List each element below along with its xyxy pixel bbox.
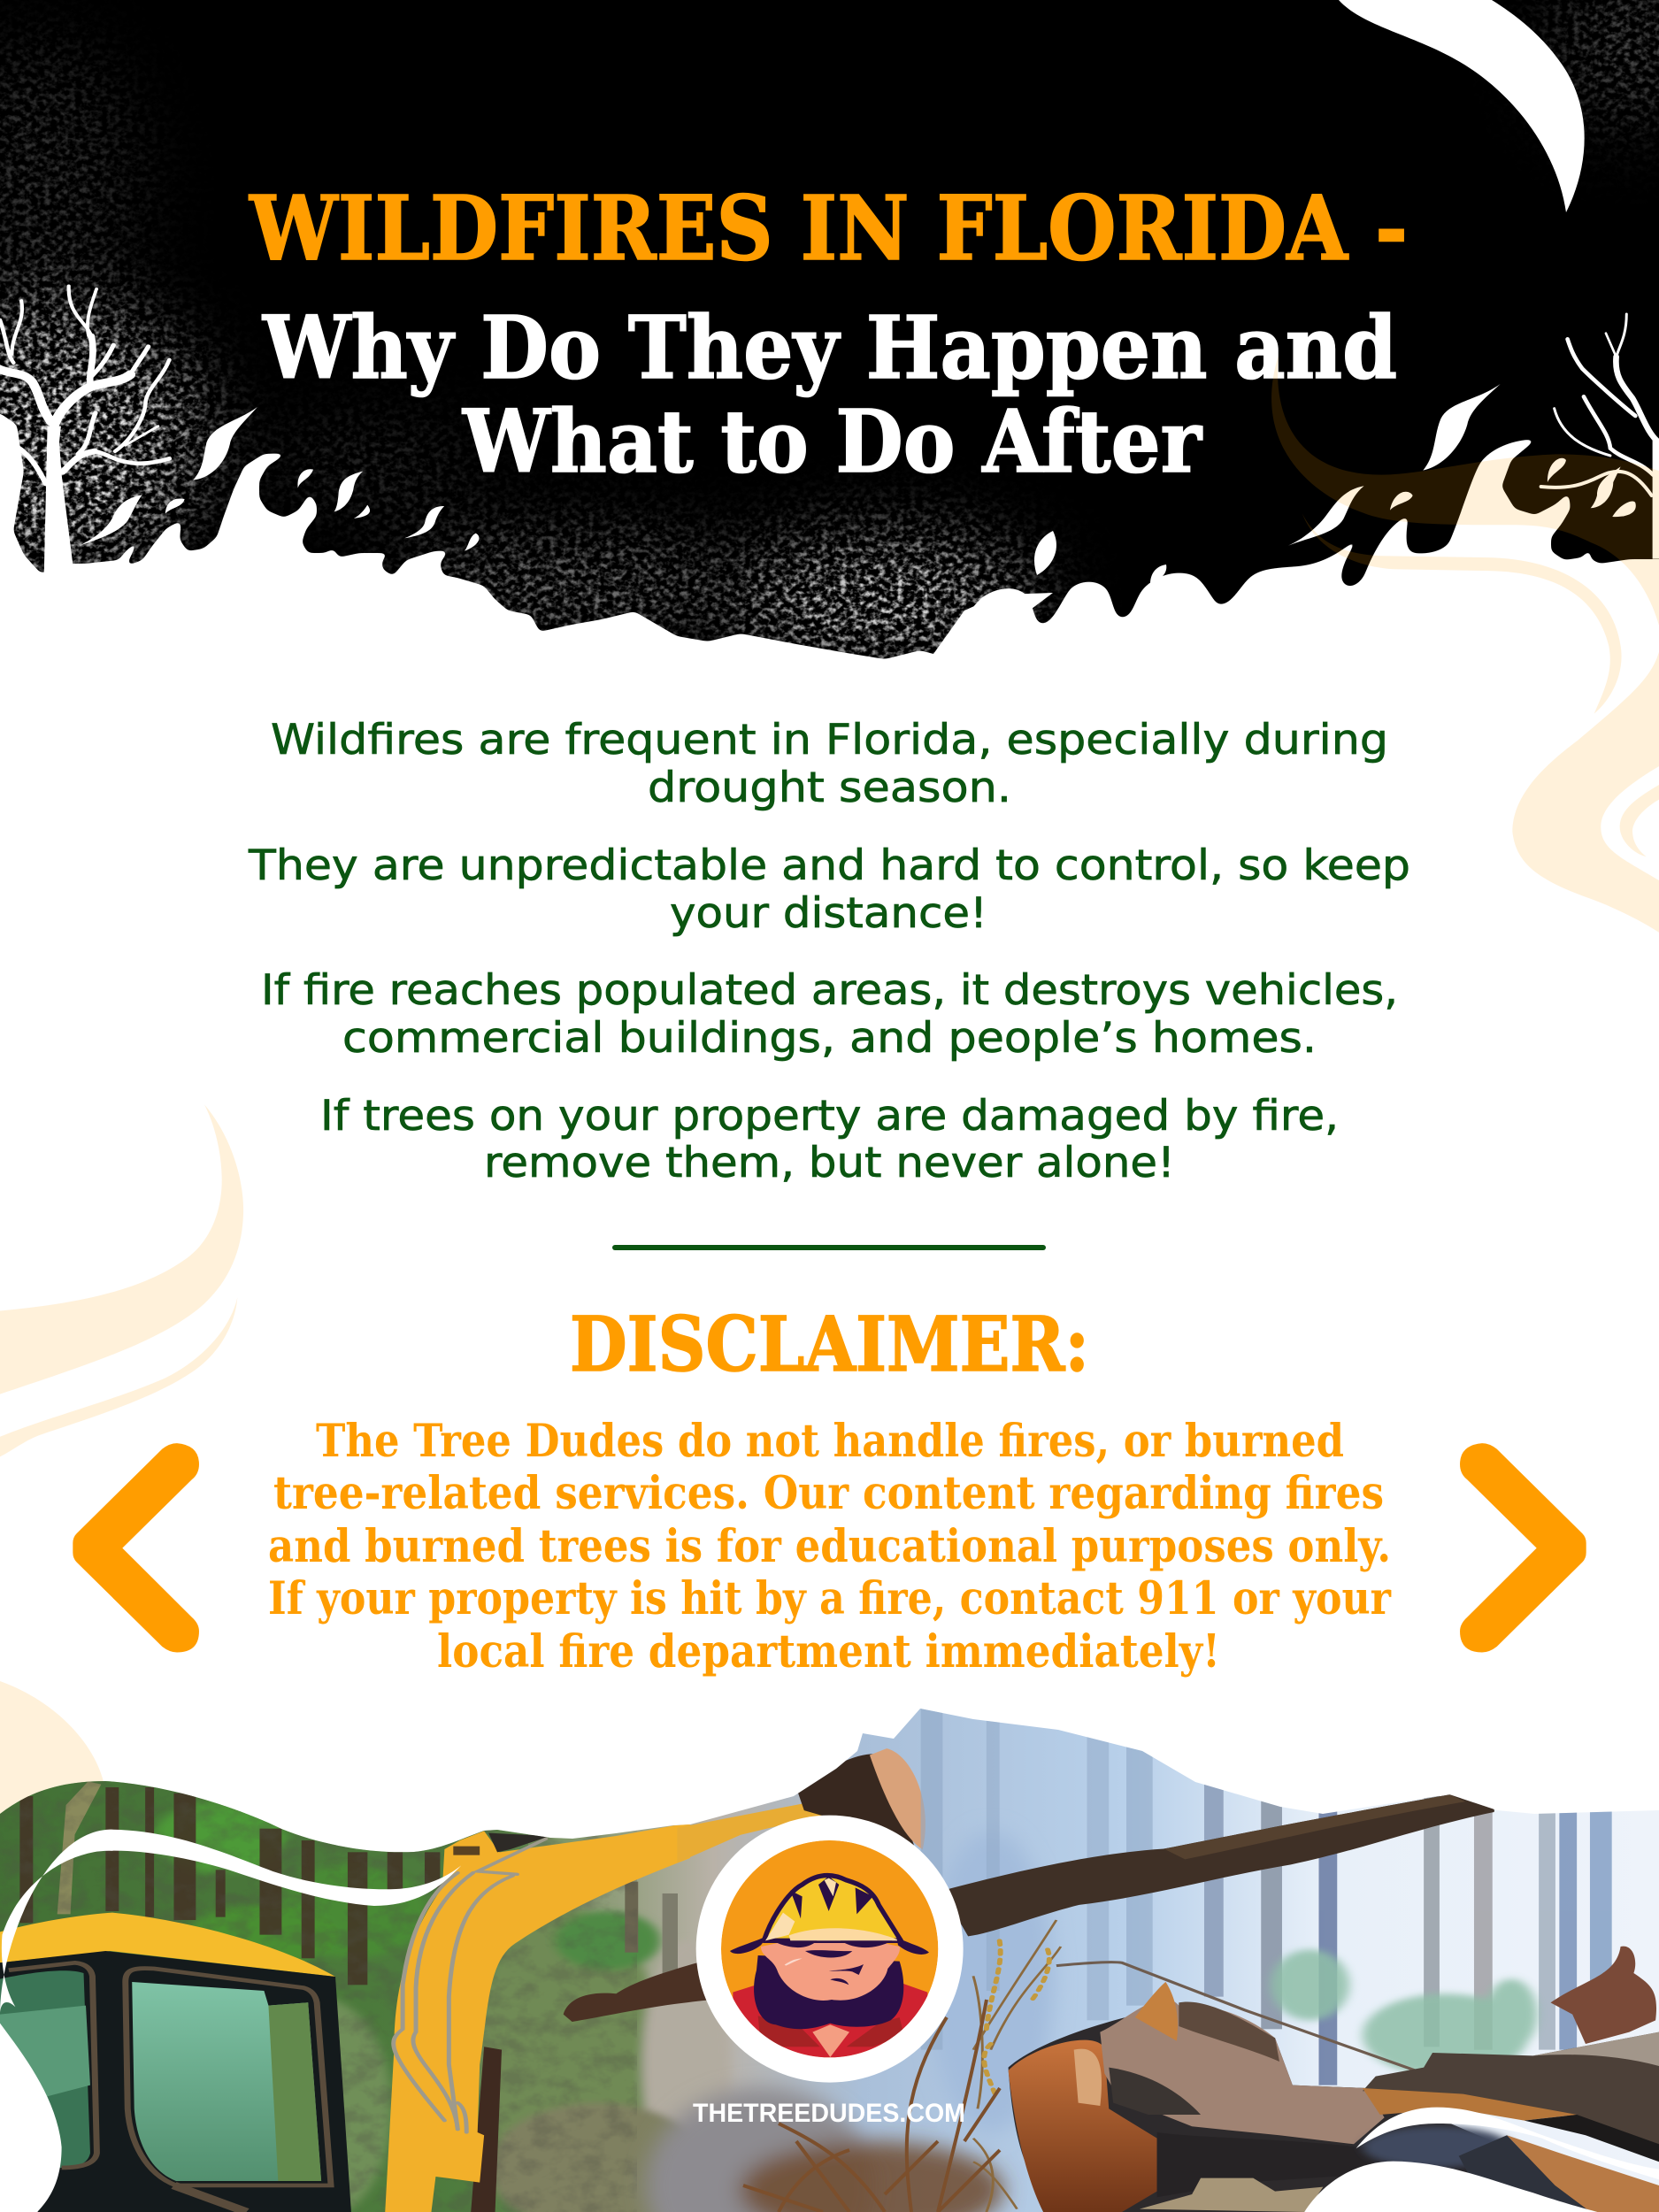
far burned stump: [1550, 1947, 1656, 2044]
website label: THETREEDUDES.COM: [693, 2099, 965, 2128]
paragraph 3: commercial buildings, and people’s homes.: [342, 1014, 1317, 1063]
title: [249, 176, 1408, 492]
white blob bottom left: [0, 2024, 62, 2212]
white wave left: [0, 1830, 461, 2015]
title line 1: WILDFIRES IN FLORIDA -: [249, 176, 1408, 280]
smoke swoosh: top right band: [0, 356, 1659, 1885]
icon: bare white tree left: [0, 286, 169, 573]
black ink header background: [0, 0, 1659, 690]
neck: [812, 2024, 849, 2057]
paragraph 3: [261, 966, 1398, 1063]
white wave bottom right: [1356, 2108, 1659, 2179]
roots bottom: [1140, 2178, 1323, 2212]
disclaimer text: The Tree Dudes do not handle fires, or burned: [316, 1415, 1344, 1468]
paragraph 2: [248, 841, 1410, 938]
bush branches under logo: [743, 2000, 1000, 2212]
smoke swoosh: left main: [0, 1104, 243, 1394]
title line 2: Why Do They Happen and: [262, 297, 1397, 398]
disclaimer text: and burned trees is for educational purposes only.: [268, 1520, 1391, 1573]
thin fallen branch: [1056, 1962, 1415, 2070]
photo background fog: [0, 1681, 1659, 2212]
photo: excavator clearing burned trees in forest: [0, 1681, 1659, 2212]
disclaimer text: [268, 1415, 1392, 1678]
white blob bottom right: [1303, 2162, 1603, 2212]
arrow: left chevron: [73, 1443, 199, 1653]
disclaimer text: If your property is hit by a fire, contact 911 or your: [268, 1572, 1392, 1625]
sunglasses: [772, 1940, 892, 1947]
arrow: right chevron: [1460, 1443, 1586, 1653]
hydraulic hoses: [394, 1839, 546, 2132]
face: [761, 1932, 900, 2001]
nose and mouth: [805, 1950, 852, 1957]
icon: bare white tree right: [1541, 314, 1659, 559]
excavator boom: [385, 1824, 690, 2212]
paragraph 3: If fire reaches populated areas, it destroys vehicles,: [261, 966, 1398, 1015]
paragraph 1: Wildfires are frequent in Florida, especially during: [271, 716, 1388, 764]
cab door window: [132, 1982, 321, 2181]
excavator cab frame: [0, 1951, 351, 2212]
bush left: [973, 1920, 1061, 2212]
title line 3: What to Do After: [462, 391, 1203, 492]
broken log right: [1363, 2032, 1659, 2150]
hard hat dome: [764, 1876, 901, 1940]
shirt: [733, 1984, 927, 2062]
smoke swoosh: inner stripe: [1620, 784, 1659, 856]
cab left window: [0, 1970, 90, 2168]
logo white ring: [696, 1816, 964, 2083]
paragraph 4: remove them, but never alone!: [484, 1139, 1175, 1187]
right side trees and scene: [921, 1696, 1659, 2212]
paragraph 1: drought season.: [648, 764, 1011, 812]
white flames in header: [80, 384, 1636, 681]
excavator cab roof: [0, 1913, 335, 1977]
bottom white flames over grain: [920, 593, 1053, 681]
paragraph 2: They are unpredictable and hard to control, so keep: [248, 841, 1410, 890]
flames: right group: [1288, 384, 1636, 546]
divider line: [612, 1245, 1046, 1250]
forest texture overlay: [0, 1781, 637, 2212]
arm top and bucket: [677, 1748, 926, 1863]
smoke swoosh: thin streak: [1302, 513, 1622, 714]
paragraph 2: your distance!: [670, 889, 987, 938]
left burned log stub: [563, 1962, 706, 2022]
log across the scene: [941, 1794, 1494, 1936]
disclaimer heading: DISCLAIMER:: [570, 1301, 1089, 1389]
smoke swoosh: left thin: [0, 1297, 237, 1456]
paragraph 4: [320, 1092, 1339, 1187]
logo: The Tree Dudes mascot badge: [696, 1816, 964, 2083]
hat brim: [730, 1935, 929, 1955]
white swoosh top right: [1339, 0, 1585, 212]
disclaimer text: tree-related services. Our content regarding fires: [273, 1467, 1384, 1520]
dark trunk behind boom: [471, 2047, 502, 2212]
intro text: [248, 716, 1410, 1187]
smoke swoosh: bottom left blob: [0, 1681, 106, 1885]
flames: left group: [80, 407, 479, 551]
beard: [754, 1955, 903, 2029]
upturned root stump: [1009, 2005, 1587, 2212]
logo orange disc and character: [721, 1840, 938, 2062]
smoke under log: [1363, 2126, 1511, 2168]
paragraph 4: If trees on your property are damaged by fire,: [320, 1092, 1339, 1141]
disclaimer text: local fire department immediately!: [437, 1625, 1220, 1678]
smoke swoosh: right blob: [1512, 646, 1659, 933]
mist and bush at bottom middle: [646, 1832, 1053, 2212]
forest left: [0, 1770, 731, 2212]
paragraph 1: [271, 716, 1388, 812]
